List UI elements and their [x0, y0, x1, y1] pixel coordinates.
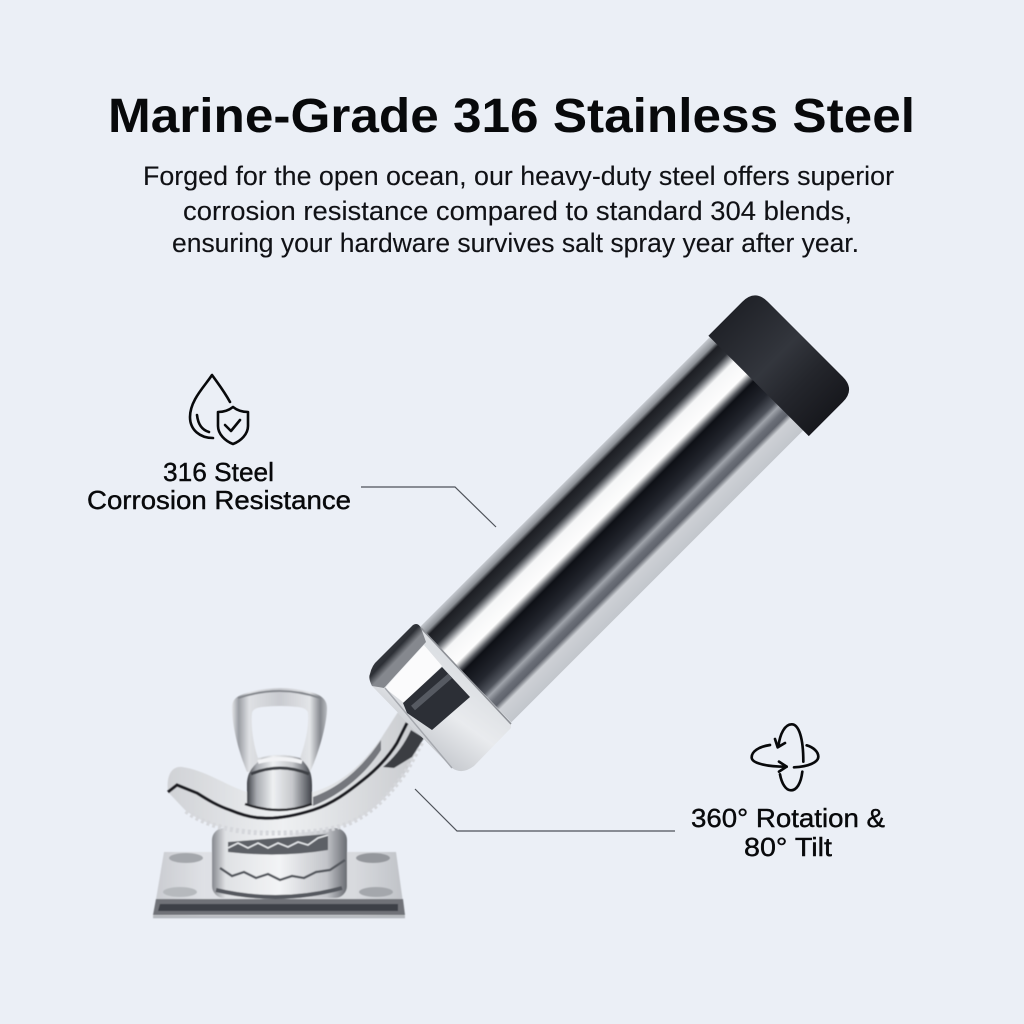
- callout: corrosion resistance: [87, 375, 351, 515]
- description text: corrosion resistance compared to standard 304 blends,: [183, 196, 852, 226]
- label: 316 Steel Corrosion Resistance: 316 Steel: [163, 457, 274, 487]
- label: 316 Steel Corrosion Resistance: Corrosion Resistance: [87, 485, 351, 515]
- label: 360 Rotation and 80 Tilt: 80° Tilt: [744, 832, 833, 862]
- leader line: corrosion resistance: [361, 487, 496, 527]
- title: Marine-Grade 316 Stainless Steel: [108, 89, 915, 143]
- mounting bracket: [153, 688, 424, 917]
- eye nut: [232, 688, 327, 810]
- icon: rotation arrows: [752, 724, 818, 790]
- black rubber end cap: [708, 289, 855, 436]
- steel tube and cap: [413, 289, 855, 732]
- description text: [143, 161, 894, 258]
- label: 316 Steel Corrosion Resistance: [87, 457, 351, 515]
- description text: Forged for the open ocean, our heavy-duty steel offers superior: [143, 161, 894, 191]
- callout: rotation and tilt: [691, 724, 885, 862]
- leader line: rotation and tilt: [415, 789, 675, 831]
- steel tube: [414, 333, 807, 726]
- curved serrated arm: [168, 712, 424, 833]
- label: 360 Rotation and 80 Tilt: [691, 803, 885, 862]
- base plate: [153, 852, 405, 917]
- rod holder product image: [153, 289, 855, 917]
- swivel pedestal: [212, 828, 347, 898]
- description text: ensuring your hardware survives salt spray year after year.: [172, 228, 859, 258]
- label: 360 Rotation and 80 Tilt: 360° Rotation &: [691, 803, 885, 833]
- icon: water drop with shield: [190, 375, 248, 444]
- steel collar: [369, 624, 511, 771]
